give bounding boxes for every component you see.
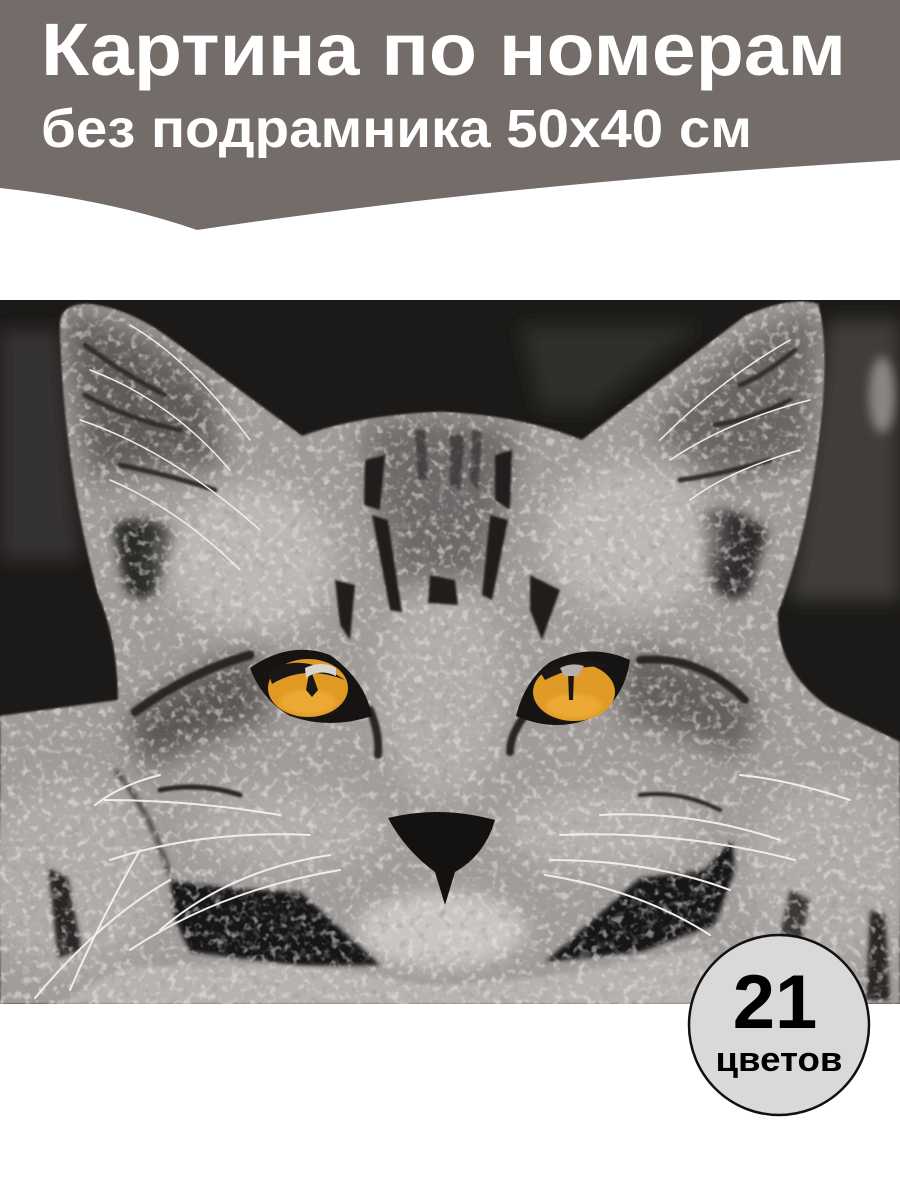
whiskers — [35, 325, 850, 998]
eye liner markings — [135, 655, 745, 810]
cat body and head — [0, 302, 900, 1004]
nose — [388, 812, 495, 905]
title: Картина по номерам — [41, 8, 846, 91]
cat painting — [0, 300, 900, 1004]
left eye — [250, 650, 372, 723]
subtitle: без подрамника 50х40 см — [41, 99, 752, 159]
tonal shading — [0, 310, 900, 975]
badge: 21 colours — [689, 935, 869, 1115]
painting background — [0, 300, 900, 1004]
badge label: цветов — [716, 1041, 842, 1079]
painterly texture — [0, 300, 900, 1004]
shadow under chin — [115, 770, 735, 966]
paws and ledge — [48, 868, 890, 1004]
tabby stripes — [335, 430, 560, 640]
ear fur streaks — [85, 345, 795, 490]
right eye — [516, 651, 630, 725]
header banner — [0, 0, 900, 230]
badge number: 21 — [733, 960, 817, 1045]
